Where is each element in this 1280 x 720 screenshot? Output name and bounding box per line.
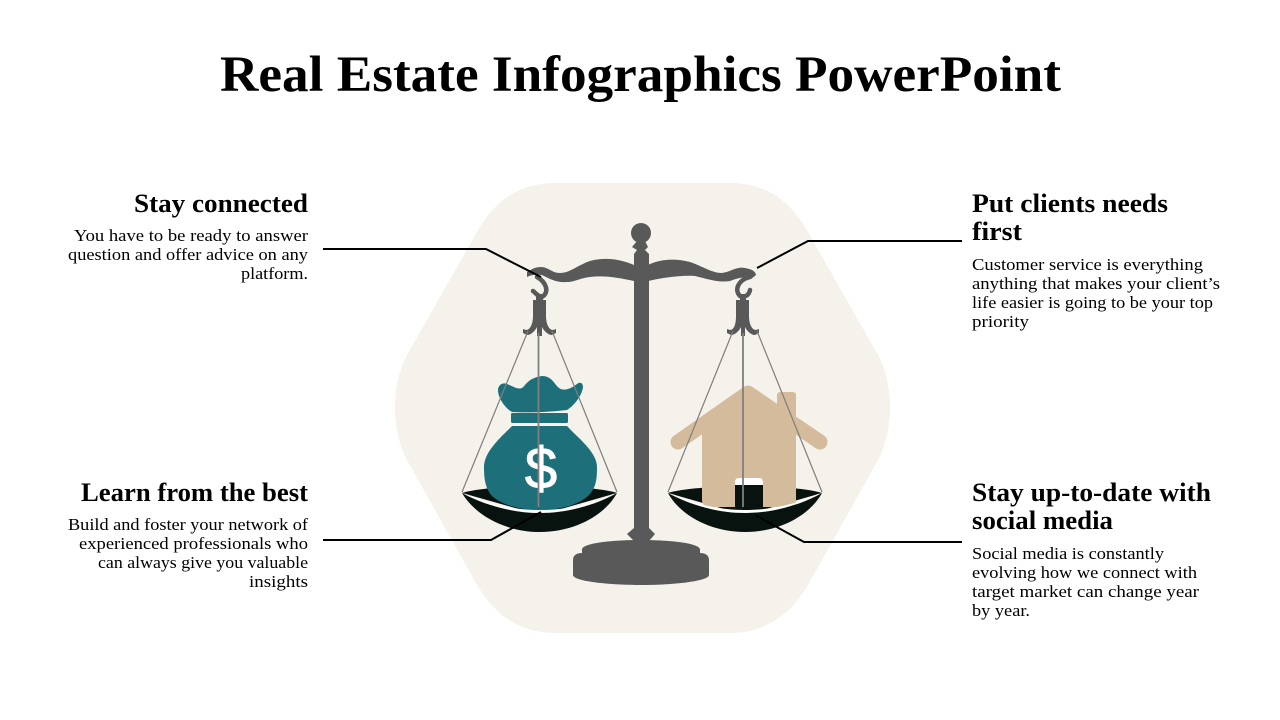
body text: experienced professionals who	[79, 534, 308, 553]
hexagon background	[395, 183, 890, 633]
connector: stay up-to-date	[755, 515, 962, 542]
body text: priority	[972, 312, 1030, 331]
text block: put clients needs first	[972, 189, 1220, 331]
body text: Social media is constantly	[972, 544, 1165, 563]
body text: target market can change year	[972, 582, 1200, 601]
body text	[68, 515, 309, 591]
left pan strings	[462, 331, 617, 507]
scale beam	[527, 259, 756, 282]
dollar sign: $	[525, 436, 557, 501]
right pan back	[668, 486, 822, 515]
title: Real Estate Infographics PowerPoint	[220, 47, 1061, 103]
body text: Customer service is everything	[972, 255, 1203, 274]
body text: evolving how we connect with	[972, 563, 1198, 582]
heading: Stay up-to-date with	[972, 478, 1212, 507]
left hanger	[523, 277, 556, 336]
left pan front	[462, 493, 617, 532]
heading: Learn from the best	[81, 478, 308, 507]
illustration: balance scale	[462, 223, 822, 585]
body text	[68, 226, 309, 283]
right hanger	[727, 277, 759, 336]
body text: life easier is going to be your top	[972, 293, 1213, 312]
heading	[972, 189, 1168, 246]
body text: anything that makes your client’s	[972, 274, 1220, 293]
connector: put clients needs first	[757, 241, 962, 268]
text block: stay connected	[68, 189, 309, 283]
scale stand	[573, 223, 709, 585]
heading: Put clients needs	[972, 189, 1168, 218]
text block: stay up-to-date with social media	[972, 478, 1212, 620]
body text: by year.	[972, 601, 1030, 620]
body text: Build and foster your network of	[68, 515, 309, 534]
icon: money bag	[484, 376, 597, 510]
right pan strings	[668, 331, 822, 507]
body text: insights	[249, 572, 308, 591]
right pan front	[668, 493, 822, 532]
text block: learn from the best	[68, 478, 309, 591]
connector: stay connected	[323, 249, 541, 277]
heading	[972, 478, 1212, 535]
heading: first	[972, 217, 1022, 246]
body text: can always give you valuable	[98, 553, 308, 572]
body text: You have to be ready to answer	[74, 226, 309, 245]
icon: house	[678, 392, 820, 509]
heading: Stay connected	[134, 189, 309, 218]
body text: question and offer advice on any	[68, 245, 309, 264]
connector: learn from the best	[323, 512, 541, 540]
body text: platform.	[241, 264, 308, 283]
body text	[972, 544, 1200, 620]
door	[735, 478, 763, 509]
heading: social media	[972, 506, 1113, 535]
body text	[972, 255, 1220, 331]
left pan back	[462, 486, 617, 515]
